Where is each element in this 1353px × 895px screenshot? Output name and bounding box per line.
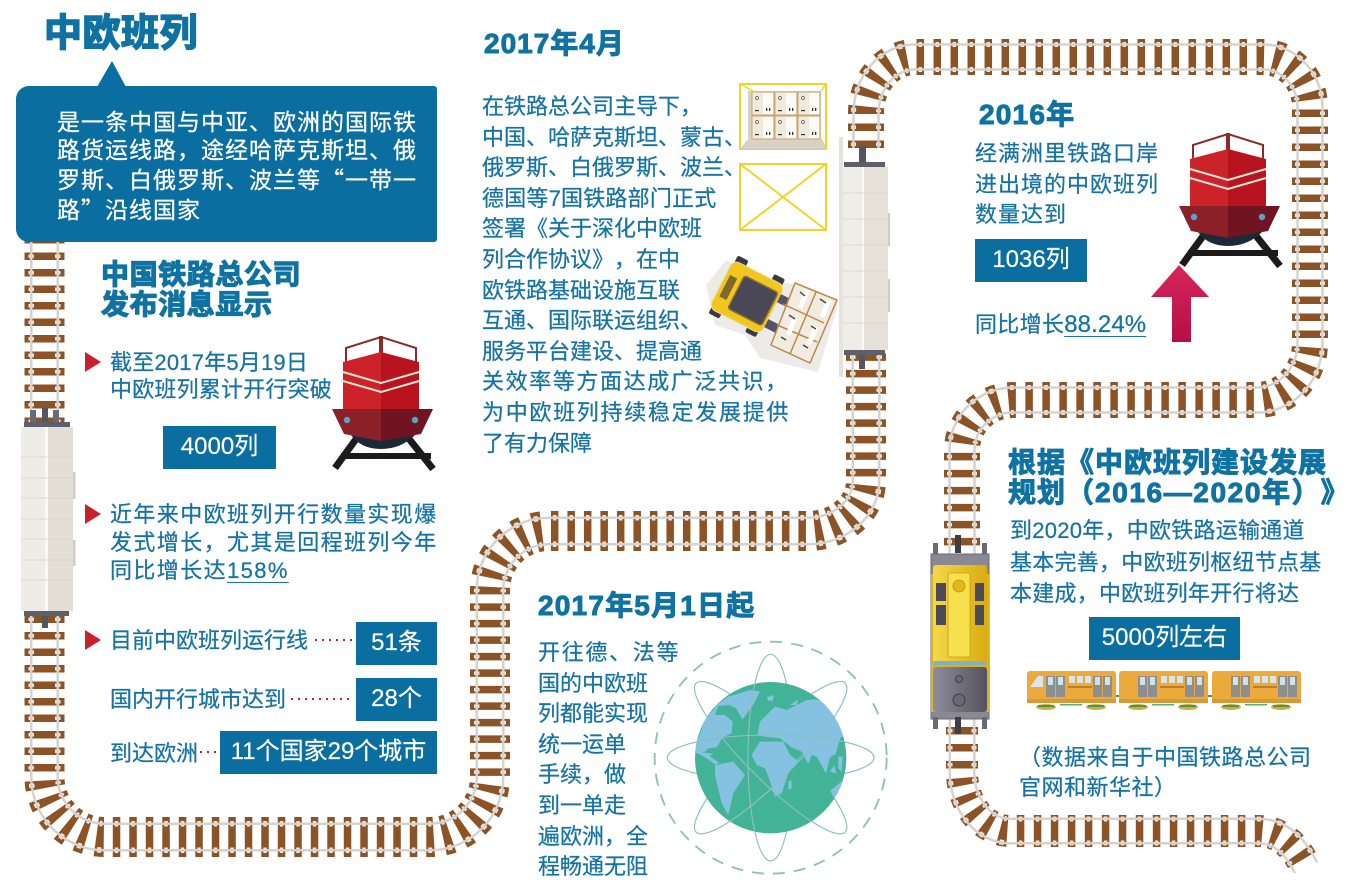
heading: development plan: 规划（2016—2020年）》 — [1008, 476, 1350, 508]
text: April 2017 agreement: 中国、哈萨克斯坦、蒙古、 — [482, 125, 746, 150]
heading: railway company: 发布消息显示 — [101, 289, 273, 320]
title: 中欧班列 — [44, 13, 198, 55]
number box: 11 countries: 11个国家29个城市 — [231, 738, 426, 765]
icon: red up arrow — [1151, 265, 1209, 342]
text: unified waybill: 开往德、法等 — [538, 640, 680, 665]
number box: 28 — [356, 678, 437, 721]
track: upper right loop — [866, 57, 1310, 560]
callout: definition panel — [16, 86, 437, 242]
number box: 51 — [356, 622, 437, 665]
text: April 2017 agreement: 列合作协议》，在中 — [482, 247, 680, 272]
text: April 2017 agreement: 签署《关于深化中欧班 — [482, 216, 702, 241]
number box: 28: 28个 — [371, 685, 422, 712]
icon: left white freight wagon — [21, 408, 76, 628]
icon: forklift with cartons — [706, 254, 838, 372]
text: 2020 goal: 到2020年，中欧铁路运输通道 — [1010, 518, 1305, 543]
number box: 11 countries — [220, 731, 437, 774]
number box: 1036: 1036列 — [992, 246, 1070, 273]
dotted leader: lines — [315, 639, 354, 641]
text: Manzhouli crossing: 经满洲里铁路口岸 — [975, 141, 1159, 166]
definition text: 罗斯、白俄罗斯、波兰等“一带一 — [57, 161, 417, 195]
text: cumulative trains — [110, 350, 332, 402]
number box: 4000: 4000列 — [181, 433, 258, 460]
number box: 4000 — [163, 426, 276, 469]
heading: 2016: 2016年 — [979, 99, 1075, 130]
text: April 2017 agreement: 服务平台建设、提高通 — [482, 339, 702, 364]
text: data source: 官网和新华社） — [1019, 775, 1177, 800]
text: unified waybill: 遍欧洲，全 — [538, 824, 648, 849]
icon: container with cartons — [740, 84, 826, 149]
callout pointer — [97, 61, 126, 87]
text: unified waybill — [538, 640, 680, 879]
icon: upper white freight wagon — [839, 137, 890, 377]
text: April 2017 agreement: 在铁路总公司主导下， — [482, 94, 702, 119]
heading: development plan — [1008, 447, 1350, 508]
icon: globe with orbits — [655, 642, 887, 874]
text: reach Europe: 到达欧洲 — [110, 741, 198, 766]
number box: 5000: 5000列左右 — [1102, 624, 1227, 651]
dotted leader: cities — [291, 698, 354, 700]
bullet marker 3 — [85, 630, 101, 650]
text: unified waybill: 程畅通无阻 — [538, 854, 648, 879]
text: 2020 goal: 本建成，中欧班列年开行将达 — [1010, 581, 1299, 606]
text: cumulative trains: 截至2017年5月19日 — [110, 350, 308, 375]
number box: 51: 51条 — [371, 629, 422, 656]
text: data source: （数据来自于中国铁路总公司 — [1019, 745, 1312, 770]
text: data source — [1019, 745, 1312, 800]
text: growth: 近年来中欧班列开行数量实现爆 — [110, 502, 438, 527]
text: Manzhouli crossing — [975, 141, 1159, 227]
text: operating lines: 目前中欧班列运行线 — [110, 628, 308, 653]
icon: yellow locomotive — [931, 535, 989, 734]
text: April 2017 agreement: 欧铁路基础设施互联 — [482, 278, 680, 303]
number box: 1036 — [975, 239, 1087, 282]
icon: small orange passenger train — [1027, 671, 1301, 710]
text: domestic cities: 国内开行城市达到 — [110, 687, 286, 712]
text: unified waybill: 国的中欧班 — [538, 671, 648, 696]
heading: development plan: 根据《中欧班列建设发展 — [1008, 447, 1327, 478]
icon: red locomotive right — [1179, 133, 1280, 266]
text: cumulative trains: 中欧班列累计开行突破 — [110, 377, 332, 402]
text: unified waybill: 到一单走 — [538, 793, 626, 818]
text: 2020 goal — [1010, 518, 1322, 606]
text: Manzhouli crossing: 进出境的中欧班列 — [975, 172, 1159, 197]
text: growth: 发式增长，尤其是回程班列今年 — [110, 530, 438, 555]
text: 2020 goal: 基本完善，中欧班列枢纽节点基 — [1010, 550, 1322, 574]
text: year on year growth: 同比增长88.24% — [975, 311, 1146, 338]
text: Manzhouli crossing: 数量达到 — [975, 202, 1067, 227]
definition text: 是一条中国与中亚、欧洲的国际铁 — [57, 109, 417, 135]
text: growth — [110, 502, 438, 583]
heading: May 2017: 2017年5月1日起 — [538, 590, 755, 621]
definition text: 路”沿线国家 — [57, 191, 201, 225]
heading: railway company: 中国铁路总公司 — [101, 259, 301, 290]
definition text — [57, 109, 417, 225]
icon: empty container — [740, 164, 826, 230]
track: left and middle section — [44, 236, 866, 837]
heading: railway company — [100, 259, 301, 320]
text: April 2017 agreement: 关效率等方面达成广泛共识， — [482, 369, 789, 394]
text: April 2017 agreement: 德国等7国铁路部门正式 — [482, 186, 716, 211]
text: unified waybill: 统一运单 — [538, 732, 626, 757]
text: unified waybill: 列都能实现 — [538, 701, 648, 726]
dotted leader: Europe — [200, 751, 220, 753]
bullet marker 1 — [85, 352, 101, 372]
bullet marker 2 — [85, 504, 101, 524]
text: unified waybill: 手续，做 — [538, 762, 626, 787]
text: April 2017 agreement: 为中欧班列持续稳定发展提供 — [482, 400, 790, 425]
definition text: 路货运线路，途经哈萨克斯坦、俄 — [57, 137, 417, 163]
text: April 2017 agreement: 俄罗斯、白俄罗斯、波兰、 — [482, 155, 746, 180]
track: lower right end — [962, 710, 1306, 868]
number box: 5000 — [1089, 617, 1240, 660]
text: April 2017 agreement — [482, 94, 790, 456]
text: April 2017 agreement: 了有力保障 — [482, 431, 592, 456]
icon: red locomotive left — [332, 336, 433, 469]
text: April 2017 agreement: 互通、国际联运组织、 — [482, 308, 702, 333]
heading: April 2017: 2017年4月 — [484, 28, 625, 59]
text: growth: 同比增长达158% — [110, 558, 289, 583]
